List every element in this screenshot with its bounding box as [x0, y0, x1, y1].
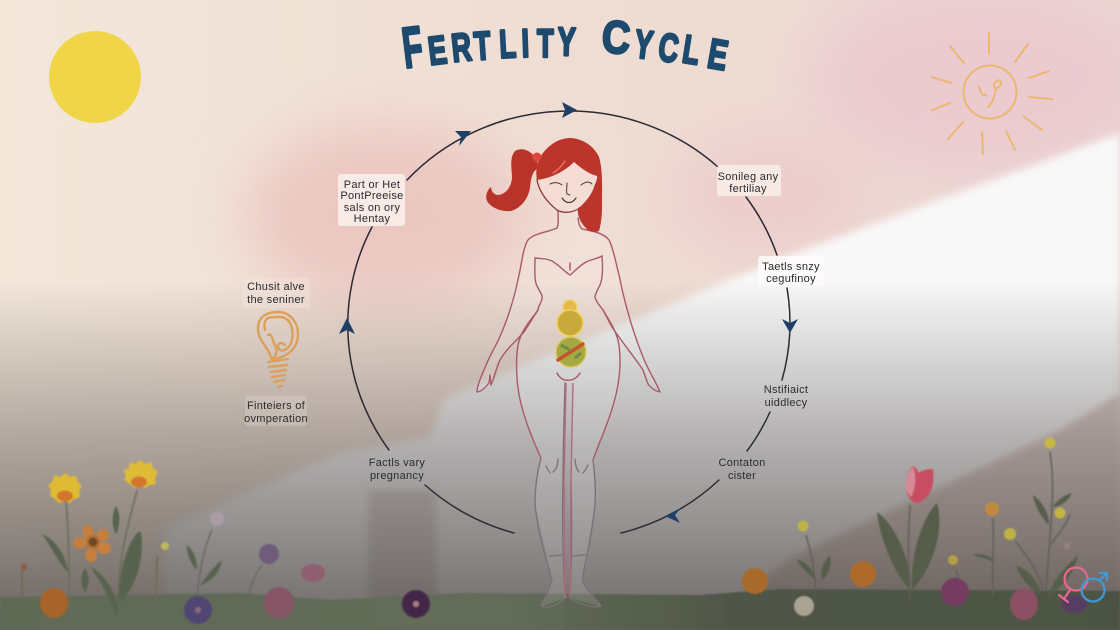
label: upper right: fertiliay [729, 183, 767, 195]
ponytail [486, 149, 538, 211]
label: right upper [758, 256, 824, 286]
label: left upper: Chusit alve [247, 281, 305, 293]
label: left upper [242, 278, 310, 308]
label: right upper: cegufinoy [766, 273, 816, 285]
arrow: right [782, 319, 798, 333]
title: L [680, 27, 703, 74]
head [537, 150, 598, 212]
flower: tulip [905, 466, 933, 503]
label: right lower: uiddlecy [765, 397, 808, 409]
label: upper left: Part or Het [344, 179, 400, 191]
title: Y [632, 22, 656, 69]
hair bow [532, 152, 542, 162]
title: F [399, 14, 426, 80]
label: lower right [718, 457, 766, 482]
label: lower right: cister [728, 470, 756, 482]
label: upper right [717, 165, 781, 196]
label: left lower: ovmperation [244, 413, 308, 425]
arrow: lower right [665, 508, 681, 523]
body fill [477, 210, 660, 607]
flowers: left group [21, 460, 430, 624]
label: upper right: Sonileg any [718, 171, 779, 183]
cycle ring with arrows [339, 102, 798, 533]
title: C [656, 25, 681, 72]
label: upper left: PontPreeise [340, 190, 404, 202]
title [399, 11, 732, 80]
title: R [449, 25, 474, 71]
label: upper left [338, 174, 405, 226]
label: right lower: Nstifiaict [764, 384, 808, 396]
arrow: left [339, 318, 355, 334]
label: lower left: Factls vary [369, 457, 425, 469]
label: left upper: the seniner [247, 294, 305, 306]
arrow: top [562, 102, 577, 118]
title: L [498, 22, 517, 67]
title: Y [557, 20, 577, 65]
face details [550, 161, 592, 202]
label: right upper: Taetls snzy [762, 261, 820, 273]
label: lower left: pregnancy [370, 470, 424, 482]
label: left lower [244, 396, 308, 426]
title: T [473, 24, 492, 69]
flower: yellow [48, 473, 82, 503]
title: C [600, 11, 632, 65]
title: E [704, 29, 732, 80]
icon: yellow sun [49, 31, 141, 123]
title: T [537, 22, 554, 66]
icon: outline sun [932, 32, 1052, 154]
flowers: right group [742, 438, 1087, 620]
label: left lower: Finteiers of [247, 400, 306, 412]
label: right lower [764, 384, 808, 409]
label: lower right: Contaton [718, 457, 766, 469]
label: lower left [369, 457, 425, 482]
hair [536, 138, 602, 232]
label: upper left: Hentay [354, 213, 391, 225]
body outline [477, 210, 660, 460]
icon: light bulb [258, 312, 298, 387]
figure: woman [477, 138, 660, 607]
organ icons [556, 300, 586, 367]
flower: yellow tall [123, 460, 158, 488]
icon: gender symbols [1059, 568, 1107, 602]
label: upper left: sals on ory [344, 202, 400, 214]
grass [0, 589, 1120, 630]
flower: orange [73, 525, 111, 562]
title: E [426, 28, 449, 74]
arrow: upper left [455, 131, 471, 146]
title: I [521, 22, 530, 66]
